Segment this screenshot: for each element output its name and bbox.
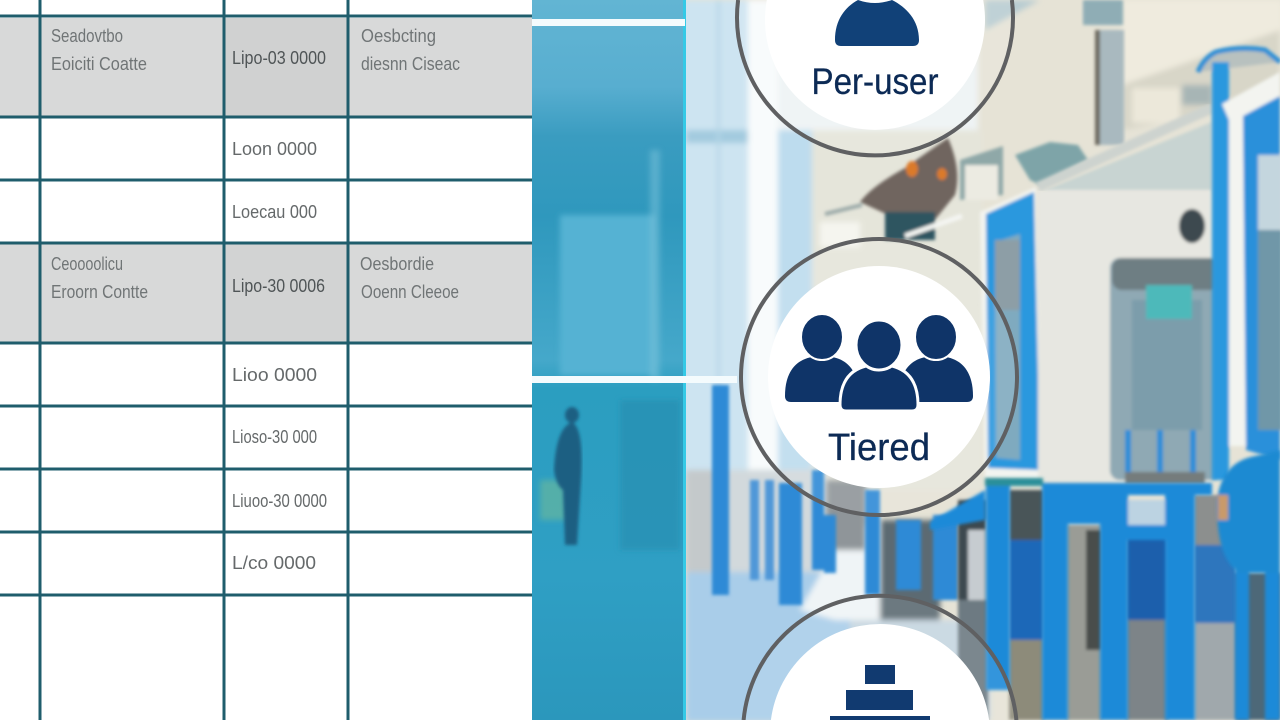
shelf rail — [1038, 108, 1212, 187]
highlighted row 1 — [0, 18, 532, 116]
table text: plain rows 2 and 3 — [232, 139, 317, 222]
table text: plain rows 2 and 3: Loecau 000 — [232, 202, 317, 222]
table text: row 4: Oesbordie — [360, 254, 434, 274]
pipes — [1083, 0, 1124, 145]
table text: row 4: Ooenn Cleeoe — [361, 282, 459, 302]
floor — [686, 470, 990, 720]
table text: row 1: Oesbcting — [361, 26, 436, 46]
badge: stacked pricing — [744, 596, 1016, 720]
table text: plain rows 5 to 8: Lioso-30 000 — [232, 427, 317, 447]
table text: plain rows 5 to 8: L/co 0000 — [232, 553, 316, 573]
icon: three users — [785, 314, 973, 411]
badge: per-user pricing — [737, 0, 1013, 155]
dark object on shelf — [825, 138, 962, 240]
table text: row 4: Lipo-30 0006 — [232, 276, 325, 296]
back wall and windows — [680, 0, 1280, 490]
table text: plain rows 2 and 3: Loon 0000 — [232, 139, 317, 159]
shelf brackets — [960, 122, 1212, 200]
person silhouette — [554, 407, 582, 545]
table text: row 4: Eroorn Contte — [51, 282, 148, 302]
cyan edge line — [683, 0, 686, 720]
icon: single user — [835, 0, 919, 46]
table text: row 1: Lipo-03 0000 — [232, 48, 326, 68]
badge: tiered pricing — [741, 239, 1017, 515]
lower right gaps — [958, 490, 1280, 720]
photo background: factory with blue machines — [680, 0, 1280, 720]
table text: plain rows 5 to 8 — [232, 365, 327, 573]
table text: row 1: Seadovtbo — [51, 26, 123, 46]
table text: plain rows 5 to 8: Liuoo-30 0000 — [232, 491, 327, 511]
machine 1 — [980, 187, 1220, 484]
icon: stacked pyramid — [830, 665, 930, 720]
table text: row 1: Eoiciti Coatte — [51, 54, 147, 74]
blue table frames — [930, 450, 1280, 720]
label: Tiered: Tiered — [828, 427, 930, 469]
comparison table — [0, 0, 532, 720]
table text: row 1: diesnn Ciseac — [361, 54, 460, 74]
machine 2 — [1198, 48, 1280, 480]
highlighted row 2 — [0, 244, 532, 342]
blue stands lower left — [712, 385, 958, 605]
table text: row 4 — [51, 254, 459, 302]
label: Per-user: Per-user — [812, 61, 938, 102]
table grid lines — [0, 0, 532, 720]
table text: row 1 — [51, 26, 460, 74]
table text: plain rows 5 to 8: Lioo 0000 — [232, 365, 317, 385]
white divider bars — [532, 19, 737, 383]
table text: row 4: Ceoooolicu — [51, 254, 123, 274]
teal blurred panel — [532, 0, 686, 720]
